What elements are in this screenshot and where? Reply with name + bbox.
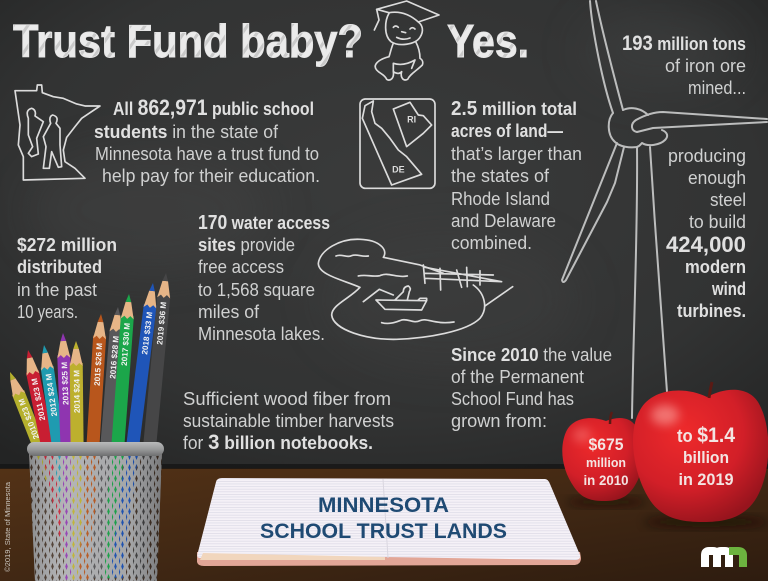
text: public school students bbox=[94, 95, 320, 186]
text: iron ore and turbines: of iron ore bbox=[665, 56, 746, 76]
text: public school students: All 862,971 public school bbox=[113, 95, 314, 120]
big apple: 2019: to $1.4 bbox=[677, 424, 735, 447]
icon: lake with boat and dock bbox=[318, 239, 513, 339]
text: distributed funds: 10 years. bbox=[17, 302, 78, 322]
icon: Delaware and Rhode Island: DE bbox=[392, 164, 405, 174]
notebook title: MINNESOTA bbox=[318, 494, 449, 517]
text: wood fiber bbox=[183, 389, 394, 454]
title: Trust Fund baby? bbox=[13, 15, 363, 67]
text: iron ore and turbines: enough bbox=[688, 168, 746, 188]
text: distributed funds: distributed bbox=[17, 257, 102, 277]
text: iron ore and turbines: wind bbox=[711, 279, 746, 299]
text: acres of land bbox=[451, 98, 582, 253]
text: iron ore and turbines: turbines. bbox=[677, 301, 746, 321]
pencil 2013 bbox=[57, 333, 78, 580]
text: distributed funds: $272 million bbox=[17, 235, 117, 255]
text: water access sites: miles of bbox=[198, 302, 260, 322]
big apple: 2019: in 2019 bbox=[678, 470, 734, 489]
big apple: 2019: billion bbox=[683, 448, 729, 467]
wooden desk bbox=[0, 464, 768, 581]
text: water access sites: Minnesota lakes. bbox=[198, 324, 325, 344]
icon: wind turbine bbox=[562, 1, 767, 418]
small apple: 2010: million bbox=[586, 455, 626, 470]
text: distributed funds bbox=[17, 235, 117, 322]
cup interior bbox=[29, 452, 162, 581]
text: acres of land: combined. bbox=[451, 233, 532, 253]
text: iron ore and turbines: modern bbox=[685, 257, 746, 277]
pencils chart bbox=[4, 272, 172, 580]
pencil 2019 bbox=[131, 272, 172, 578]
pencil 2015: 2015 $26 M bbox=[93, 342, 104, 386]
text: water access sites: to 1,568 square bbox=[198, 280, 315, 300]
text: public school students: students in the state of bbox=[94, 122, 279, 142]
text: iron ore and turbines bbox=[622, 32, 746, 321]
text: water access sites: sites provide bbox=[198, 235, 295, 255]
pencil 2017 bbox=[102, 294, 135, 579]
big apple: 2019 bbox=[633, 382, 768, 527]
pencil 2014 bbox=[70, 341, 85, 580]
pencil 2018: 2018 $33 M bbox=[140, 311, 154, 355]
text: water access sites: free access bbox=[198, 257, 284, 277]
pencil 2012: 2012 $24 M bbox=[44, 373, 59, 417]
text: water access sites: 170 water access bbox=[198, 212, 330, 234]
small apple: 2010 bbox=[562, 412, 646, 506]
pencil 2018 bbox=[110, 282, 159, 579]
icon: mesh pencil cup bbox=[27, 442, 164, 581]
icon: Minnesota map with students bbox=[15, 85, 100, 180]
text: permanent school fund bbox=[451, 345, 612, 431]
text: iron ore and turbines: 424,000 bbox=[666, 232, 746, 257]
icon: Delaware and Rhode Island bbox=[360, 99, 435, 188]
text: iron ore and turbines: to build bbox=[689, 212, 746, 232]
text: iron ore and turbines: producing bbox=[668, 146, 746, 166]
text: public school students: help pay for their education. bbox=[102, 166, 320, 186]
text: acres of land: that’s larger than bbox=[451, 144, 582, 164]
text: wood fiber: Sufficient wood fiber from bbox=[183, 389, 391, 409]
logo: mn bbox=[705, 551, 743, 567]
pencil 2016 bbox=[90, 306, 124, 579]
copyright: ©2019, State of Minnesota bbox=[3, 481, 12, 572]
pencil 2017: 2017 $30 M bbox=[120, 322, 132, 366]
icon: Delaware and Rhode Island: RI bbox=[407, 115, 416, 125]
text: distributed funds: in the past bbox=[17, 280, 97, 300]
text: acres of land: Rhode Island bbox=[451, 189, 550, 209]
text: iron ore and turbines: 193 million tons bbox=[622, 32, 746, 55]
text: permanent school fund: Since 2010 the value bbox=[451, 345, 612, 365]
text: acres of land: and Delaware bbox=[451, 211, 556, 231]
small apple: 2010: $675 bbox=[588, 435, 624, 454]
text: acres of land: the states of bbox=[451, 166, 550, 186]
pencil 2015 bbox=[78, 314, 107, 580]
text: water access sites bbox=[198, 212, 330, 344]
pencil 2011: 2011 $23 M bbox=[30, 377, 47, 421]
text: iron ore and turbines: steel bbox=[710, 190, 746, 210]
small apple: 2010: in 2010 bbox=[584, 472, 629, 488]
notebook bbox=[197, 478, 581, 566]
text: wood fiber: sustainable timber harvests bbox=[183, 411, 394, 431]
pencil 2016: 2016 $28 M bbox=[108, 335, 121, 379]
icon: baby in graduation cap bbox=[374, 1, 439, 80]
text: acres of land: 2.5 million total bbox=[451, 98, 577, 120]
pencil 2011 bbox=[22, 349, 81, 579]
text: iron ore and turbines: mined... bbox=[688, 78, 746, 98]
text: permanent school fund: grown from: bbox=[451, 411, 547, 431]
pencil 2010 bbox=[4, 370, 97, 579]
pencil 2012 bbox=[38, 344, 84, 579]
notebook title bbox=[260, 494, 507, 543]
pencil 2013: 2013 $25 M bbox=[60, 361, 71, 405]
text: permanent school fund: of the Permanent bbox=[451, 367, 584, 387]
text: acres of land: acres of land— bbox=[451, 121, 563, 141]
title: Yes. bbox=[447, 15, 529, 67]
text: permanent school fund: School Fund has bbox=[451, 389, 574, 409]
text: public school students: Minnesota have a trust fund to bbox=[95, 144, 319, 164]
pencil 2010: 2010 $23 M bbox=[17, 397, 41, 440]
text: wood fiber: for 3 billion notebooks. bbox=[183, 431, 373, 454]
notebook title: SCHOOL TRUST LANDS bbox=[260, 520, 507, 543]
pencil 2014: 2014 $24 M bbox=[72, 370, 82, 413]
pencil 2019: 2019 $36 M bbox=[155, 301, 168, 345]
